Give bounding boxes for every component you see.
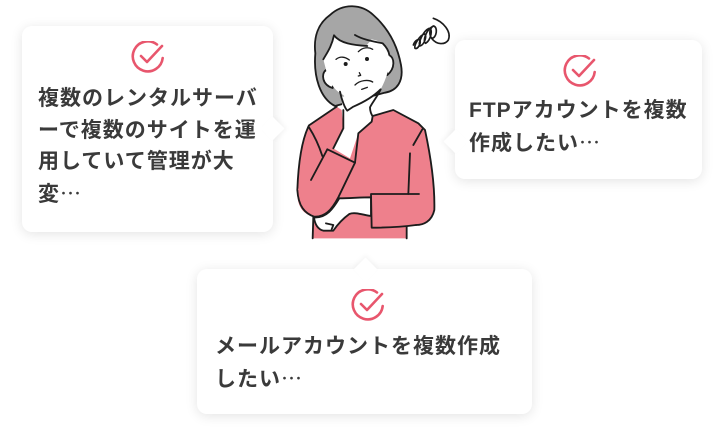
jaw and chin hand — [340, 89, 390, 117]
hand under sleeve — [314, 197, 371, 231]
sweater fold lines — [309, 127, 422, 229]
text: left bubble message — [38, 86, 258, 208]
sweater body — [297, 107, 434, 238]
text: right bubble message: FTPアカウントを複数 — [469, 99, 688, 122]
hair — [315, 6, 402, 106]
panel: left speech bubble — [22, 26, 273, 232]
text: left bubble message: 複数のレンタルサーバ — [38, 87, 258, 110]
text: left bubble message: ーで複数のサイトを運 — [38, 118, 257, 142]
icon: check mark — [563, 55, 596, 87]
text: left bubble message: 変… — [38, 178, 82, 208]
bubble pointer — [443, 129, 468, 154]
bubble pointer — [353, 257, 378, 282]
text: right bubble message: 作成したい… — [469, 126, 601, 156]
face — [323, 35, 389, 107]
text: left bubble message: 用していて管理が大 — [38, 150, 235, 173]
neck — [342, 97, 390, 125]
brows, nose, mouth — [336, 48, 373, 89]
panel: right speech bubble — [455, 40, 702, 179]
fringe lines — [323, 35, 389, 59]
illustration: worried woman — [296, 5, 450, 240]
sleeves and cuffs — [297, 149, 355, 217]
text: bottom bubble message — [215, 334, 501, 392]
icon: check mark — [351, 289, 384, 321]
panel: bottom speech bubble — [197, 269, 532, 414]
icon: worry swirl — [413, 18, 449, 48]
icon: check mark — [131, 41, 164, 73]
eyes — [344, 62, 348, 66]
bubble pointer — [260, 116, 285, 141]
text: bottom bubble message: メールアカウントを複数作成 — [215, 335, 501, 358]
ears — [323, 70, 335, 88]
text: right bubble message — [469, 98, 688, 156]
text: bottom bubble message: したい… — [215, 362, 303, 392]
